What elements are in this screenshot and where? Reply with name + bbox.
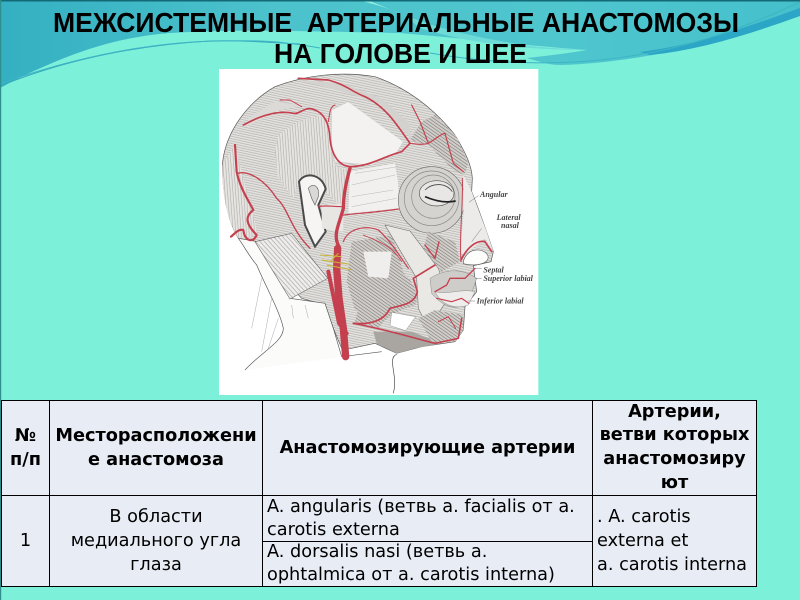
title [53, 7, 739, 69]
head silhouette and muscles [222, 74, 493, 393]
header: parent arteries [592, 400, 757, 496]
header: location: е анастомоза [88, 450, 224, 470]
header: location [49, 400, 263, 496]
row 1: parent arteries: a. carotis interna [597, 555, 747, 575]
header: number [1, 400, 50, 496]
header: anastomosing arteries: Анастомозирующие артерии [280, 438, 575, 458]
nerve strands over the carotid [320, 253, 352, 270]
row 1: dorsal nasal artery: A. dorsalis nasi (ветвь a. [267, 542, 487, 562]
title: НА ГОЛОВЕ И ШЕЕ [274, 38, 527, 69]
header: parent arteries: ветви которых [600, 425, 749, 445]
header: location: Месторасположени [55, 426, 257, 446]
table of anastomoses [1, 400, 757, 587]
illustration labels: Lateral [496, 213, 521, 222]
row 1: angular artery: carotis externa [267, 520, 400, 540]
header: parent arteries: ют [661, 473, 688, 493]
illustration labels: Superior labial [483, 274, 534, 283]
row 1: location: медиального угла [71, 531, 241, 551]
row 1: location: глаза [130, 555, 182, 575]
header: number: п/п [10, 450, 41, 470]
illustration labels: Inferior labial [476, 297, 524, 306]
illustration labels: Angular [479, 190, 508, 199]
row 1: dorsal nasal artery: ophtalmica от a. carotis interna) [267, 565, 555, 585]
title: МЕЖСИСТЕМНЫЕ АРТЕРИАЛЬНЫЕ АНАСТОМОЗЫ [53, 7, 739, 38]
arteries [231, 78, 492, 357]
row 1: angular artery: A. angularis (ветвь a. facialis от a. [267, 496, 575, 516]
header: number: № [15, 426, 36, 446]
row 1: location: В области [109, 507, 203, 527]
row 1: parent arteries [592, 495, 757, 587]
header: anastomosing arteries [262, 400, 593, 496]
header: parent arteries: анастомозиру [603, 449, 746, 469]
row 1: dorsal nasal artery [262, 541, 593, 587]
row 1: parent arteries: . A. carotis [597, 507, 691, 527]
illustration labels: nasal [501, 221, 520, 230]
row 1: parent arteries: externa et [597, 531, 688, 551]
row 1: location [49, 495, 263, 587]
illustration labels [476, 190, 534, 306]
anatomical illustration: head and neck arteries [219, 69, 538, 395]
row 1: angular artery [262, 495, 593, 542]
row 1: number [1, 495, 50, 587]
row 1: number: 1 [20, 531, 31, 551]
illustration labels: Septal [483, 265, 505, 274]
header: parent arteries: Артерии, [628, 402, 721, 422]
